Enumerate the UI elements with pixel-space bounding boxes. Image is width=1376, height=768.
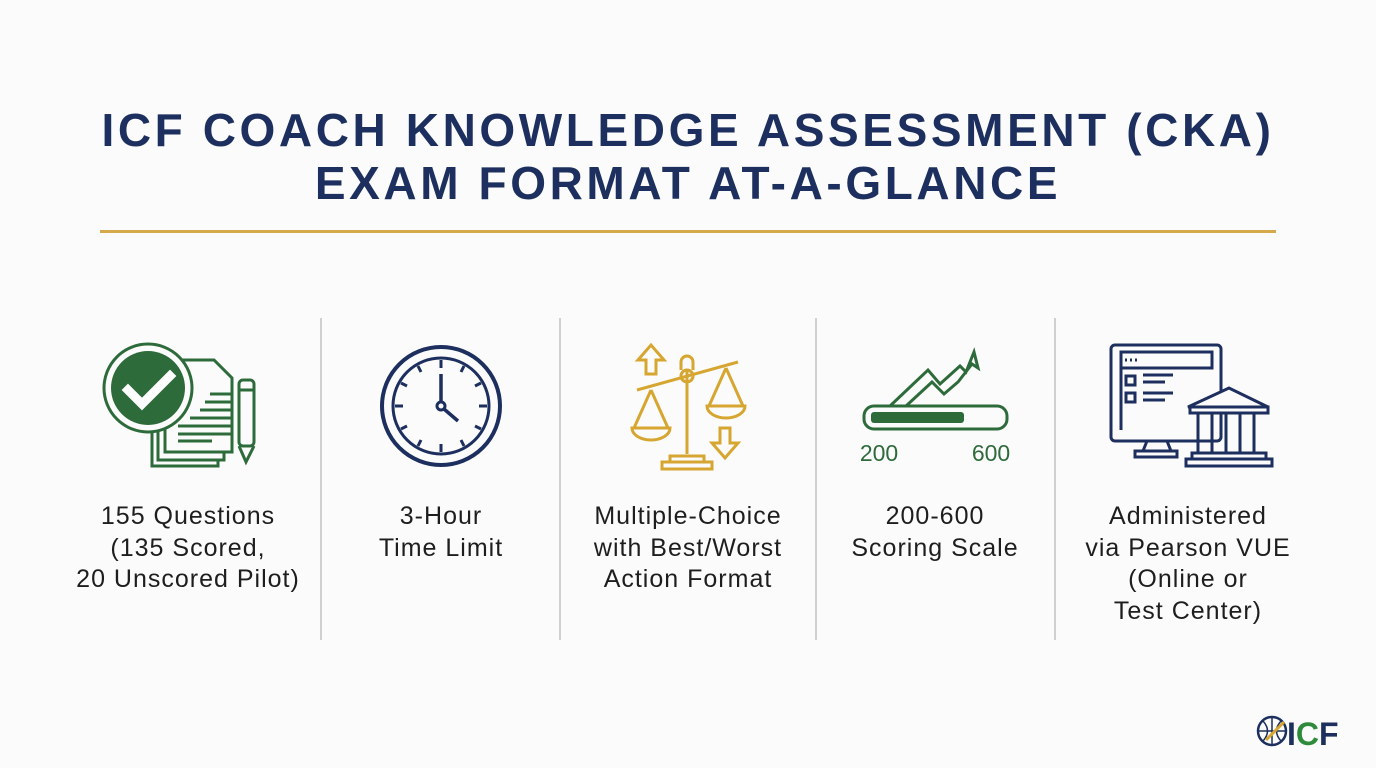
label: format: Action Format xyxy=(604,565,772,593)
label: time xyxy=(379,502,503,562)
title: EXAM FORMAT AT-A-GLANCE xyxy=(315,157,1061,209)
title xyxy=(101,104,1275,209)
label: scoring xyxy=(851,502,1019,562)
icon: scoring bar with arrow: 200 xyxy=(860,440,898,466)
label: administration: Test Center) xyxy=(1114,596,1262,624)
icon: monitor and building xyxy=(1111,345,1272,466)
label: format: with Best/Worst xyxy=(594,534,782,562)
label: scoring: 200-600 xyxy=(886,502,984,530)
label: format xyxy=(594,502,782,593)
icon: documents with check xyxy=(104,344,254,466)
label: questions: (135 Scored, xyxy=(110,534,266,562)
label: administration: (Online or xyxy=(1128,565,1248,593)
logo: ICF xyxy=(1258,716,1339,752)
icon: balance scale xyxy=(632,345,745,469)
icon: clock xyxy=(382,347,500,465)
label: time: Time Limit xyxy=(379,534,503,562)
label: time: 3-Hour xyxy=(400,502,482,530)
label: administration xyxy=(1085,502,1291,624)
label: format: Multiple-Choice xyxy=(594,502,782,530)
label: questions: 20 Unscored Pilot) xyxy=(76,565,300,593)
label: questions xyxy=(76,502,300,593)
label: scoring: Scoring Scale xyxy=(851,534,1019,562)
icon: scoring bar with arrow xyxy=(860,352,1010,466)
label: administration: Administered xyxy=(1109,502,1267,530)
label: administration: via Pearson VUE xyxy=(1085,534,1291,562)
label: questions: 155 Questions xyxy=(101,502,275,530)
icon: scoring bar with arrow: 600 xyxy=(972,440,1010,466)
title: ICF COACH KNOWLEDGE ASSESSMENT (CKA) xyxy=(101,104,1275,156)
logo: ICF: ICF xyxy=(1287,716,1339,752)
